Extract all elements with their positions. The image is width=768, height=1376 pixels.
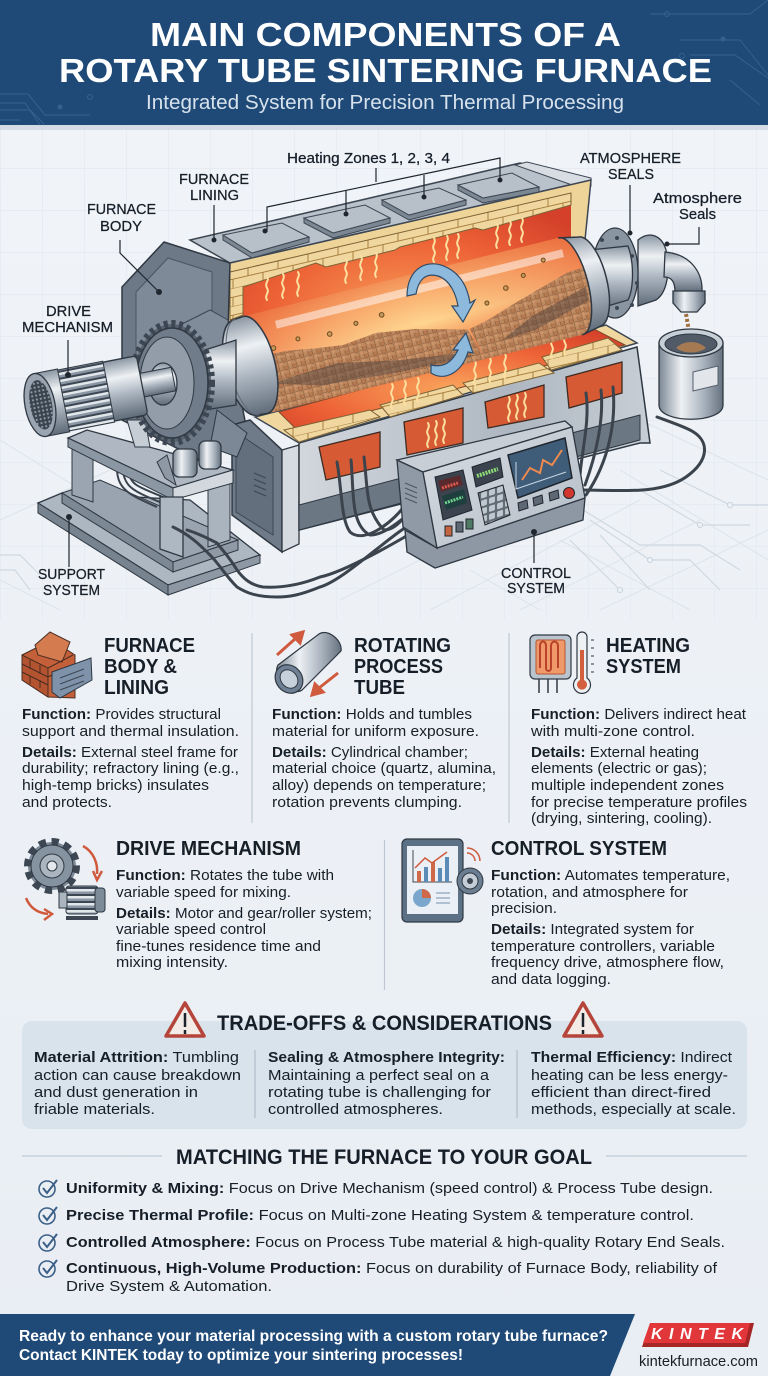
goal: continuous production: Continuous, High-Volume Production: Focus on durability of Furnace Body, reliability of	[66, 1260, 718, 1277]
panel: matching the furnace to your goal	[22, 1146, 747, 1295]
support system callout	[38, 514, 105, 599]
body text: rotation prevents clumping.	[272, 794, 462, 811]
body text: for precise temperature profiles	[531, 794, 747, 811]
atmosphere seals callout	[580, 151, 681, 236]
atmosphere seals callout: SEALS	[608, 167, 654, 183]
atmosphere seals lowercase callout: Seals	[679, 207, 716, 223]
icon: warning right	[564, 1003, 602, 1036]
body text: Function: Automates temperature,	[491, 867, 730, 884]
body text: Details: Cylindrical chamber;	[272, 744, 468, 761]
heading	[354, 635, 451, 699]
body text: rotation, and atmosphere for	[491, 884, 688, 901]
lower furnace body	[210, 325, 650, 552]
footer call to action: Contact KINTEK today to optimize your sintering processes!	[19, 1347, 463, 1364]
furnace lining callout	[179, 172, 249, 242]
upper furnace housing	[190, 162, 591, 400]
body text: variable speed for mixing.	[116, 884, 291, 901]
thermal efficiency	[531, 1049, 736, 1118]
collection bucket	[659, 329, 723, 419]
heading	[104, 635, 195, 699]
buttons	[445, 488, 574, 536]
icon: warning left	[166, 1003, 204, 1036]
heading: HEATING	[606, 635, 690, 657]
tumbling material	[271, 268, 591, 412]
body text: Function: Provides structural	[22, 706, 221, 723]
body text: and data logging.	[491, 971, 611, 988]
heating zones callout: Heating Zones 1, 2, 3, 4	[287, 151, 450, 167]
body text: Details: External steel frame for	[22, 744, 238, 761]
body text: durability; refractory lining (e.g.,	[22, 760, 239, 777]
panel: rotating process tube	[269, 632, 496, 811]
atmosphere seals callout: ATMOSPHERE	[580, 151, 681, 167]
sealing and atmosphere integrity: rotating tube is challenging for	[268, 1084, 491, 1101]
thermal efficiency: Thermal Efficiency: Indirect	[531, 1049, 733, 1066]
heater plates	[319, 362, 622, 480]
support system callout: SUPPORT	[38, 567, 105, 583]
rotating process tube	[214, 229, 618, 421]
goal: atmosphere: Controlled Atmosphere: Focus on Process Tube material & high-quality Rotary End Seals.	[66, 1234, 725, 1251]
rotation arrows	[407, 264, 475, 322]
goal: continuous production	[39, 1260, 718, 1295]
panel: heating system	[530, 632, 747, 827]
control console	[397, 421, 585, 568]
goal: uniformity: Uniformity & Mixing: Focus on Drive Mechanism (speed control) & Process Tube design.	[66, 1180, 713, 1197]
body text: high-temp bricks) insulates	[22, 777, 209, 794]
title: MAIN COMPONENTS OF A	[150, 16, 621, 53]
body text	[530, 706, 747, 827]
control system callout	[501, 529, 571, 597]
furnace lining callout: LINING	[190, 188, 239, 204]
footer call to action: Ready to enhance your material processing with a custom rotary tube furnace?	[19, 1328, 608, 1345]
heading: PROCESS	[354, 656, 443, 678]
body text: mixing intensity.	[116, 954, 228, 971]
thermal efficiency: methods, especially at scale.	[531, 1101, 736, 1118]
thermal efficiency: efficient than direct-fired	[531, 1084, 711, 1101]
sealing and atmosphere integrity	[268, 1049, 505, 1118]
body text: Details: External heating	[531, 744, 699, 761]
panel: trade-offs and considerations	[22, 1003, 747, 1129]
neck shaft	[205, 340, 236, 410]
right silver ring	[558, 229, 618, 335]
body text	[491, 867, 730, 988]
KINTEK logo	[639, 1323, 758, 1370]
material attrition: and dust generation in	[34, 1084, 198, 1101]
material attrition: friable materials.	[34, 1101, 155, 1118]
drive mechanism callout: MECHANISM	[22, 320, 113, 336]
control system callout: CONTROL	[501, 566, 571, 582]
roller	[157, 441, 221, 485]
body text: Details: Motor and gear/roller system;	[116, 905, 372, 922]
heading	[606, 635, 690, 678]
heading: LINING	[104, 677, 169, 699]
heading: DRIVE MECHANISM	[116, 838, 301, 860]
icon: bricks	[22, 632, 92, 698]
KINTEK logo: KINTEK	[651, 1326, 744, 1343]
drive mechanism callout: DRIVE	[46, 304, 91, 320]
cabling	[173, 387, 705, 597]
body text: temperature controllers, variable	[491, 938, 715, 955]
callout labels and leaders	[22, 151, 742, 599]
displays	[435, 438, 572, 525]
furnace end plate	[122, 242, 248, 460]
material attrition: action can cause breakdown	[34, 1067, 241, 1084]
heading: FURNACE	[104, 635, 195, 657]
thermal efficiency: heating can be less energy-	[531, 1067, 728, 1084]
body text	[272, 706, 496, 811]
body text: multiple independent zones	[531, 777, 724, 794]
body text: Function: Rotates the tube with	[116, 867, 334, 884]
icon: tube	[269, 632, 341, 699]
material attrition	[34, 1049, 241, 1118]
body text	[22, 706, 239, 811]
heating zone plates	[223, 173, 539, 258]
atmosphere seal flange and elbow	[590, 228, 705, 337]
gear	[133, 324, 211, 442]
blueprint grid backdrop	[0, 125, 768, 620]
panel: drive mechanism	[26, 838, 372, 971]
heading: CONTROL SYSTEM	[491, 838, 667, 860]
sealing and atmosphere integrity: Sealing & Atmosphere Integrity:	[268, 1049, 505, 1066]
KINTEK logo: kintekfurnace.com	[639, 1353, 758, 1370]
body text: elements (electric or gas);	[531, 760, 707, 777]
atmosphere seals lowercase callout	[653, 191, 742, 246]
subtitle: Integrated System for Precision Thermal Processing	[146, 92, 624, 114]
panel: control system	[402, 838, 730, 988]
motor	[19, 348, 180, 439]
body text: variable speed control	[116, 921, 266, 938]
goal: continuous production: Drive System & Automation.	[66, 1278, 272, 1295]
icon: heater and thermometer	[530, 632, 594, 693]
body text: support and thermal insulation.	[22, 723, 239, 740]
heading: BODY &	[104, 656, 177, 678]
heading: MATCHING THE FURNACE TO YOUR GOAL	[176, 1146, 592, 1169]
header banner	[0, 0, 768, 130]
body text: Details: Integrated system for	[491, 921, 694, 938]
sealing and atmosphere integrity: Maintaining a perfect seal on a	[268, 1067, 490, 1084]
body text: Function: Delivers indirect heat	[531, 706, 747, 723]
body text: frequency drive, atmosphere flow,	[491, 954, 724, 971]
title: ROTARY TUBE SINTERING FURNACE	[59, 52, 712, 89]
left silver ring	[214, 312, 287, 421]
heating zones callout	[262, 151, 502, 234]
body text: Function: Holds and tumbles	[272, 706, 472, 723]
body text: fine-tunes residence time and	[116, 938, 321, 955]
heading: ROTATING	[354, 635, 451, 657]
heading: TRADE-OFFS & CONSIDERATIONS	[217, 1012, 552, 1035]
heading: SYSTEM	[606, 656, 681, 678]
heading: TUBE	[354, 677, 405, 699]
title	[59, 16, 712, 89]
support frame	[38, 420, 260, 595]
panel: furnace body and lining	[22, 632, 239, 811]
support system callout: SYSTEM	[43, 583, 100, 599]
furnace lining callout: FURNACE	[179, 172, 249, 188]
goal: thermal profile: Precise Thermal Profile: Focus on Multi-zone Heating System & temperature control.	[66, 1207, 694, 1224]
icon: gear and motor	[26, 842, 105, 920]
furnace body callout: BODY	[100, 219, 142, 235]
body text: material for uniform exposure.	[272, 723, 479, 740]
body text	[116, 867, 372, 971]
heat waves in chamber	[266, 218, 523, 300]
drive mechanism callout	[22, 304, 113, 378]
furnace body callout: FURNACE	[87, 202, 156, 218]
furnace illustration	[19, 151, 742, 599]
motor and drive gear	[19, 324, 236, 442]
footer call to action	[0, 1314, 635, 1376]
body text: precision.	[491, 900, 557, 917]
body text: and protects.	[22, 794, 112, 811]
furnace body callout	[87, 202, 162, 295]
sealing and atmosphere integrity: controlled atmospheres.	[268, 1101, 443, 1118]
atmosphere seals lowercase callout: Atmosphere	[653, 191, 742, 207]
body text: alloy) depends on temperature;	[272, 777, 486, 794]
icon: tablet dashboard	[402, 839, 483, 922]
control system callout: SYSTEM	[507, 581, 565, 597]
coiled cable behind frame	[117, 470, 168, 507]
body text: (drying, sintering, cooling).	[531, 810, 712, 827]
body text: material choice (quartz, alumina,	[272, 760, 496, 777]
material attrition: Material Attrition: Tumbling	[34, 1049, 239, 1066]
body text: with multi-zone control.	[530, 723, 695, 740]
